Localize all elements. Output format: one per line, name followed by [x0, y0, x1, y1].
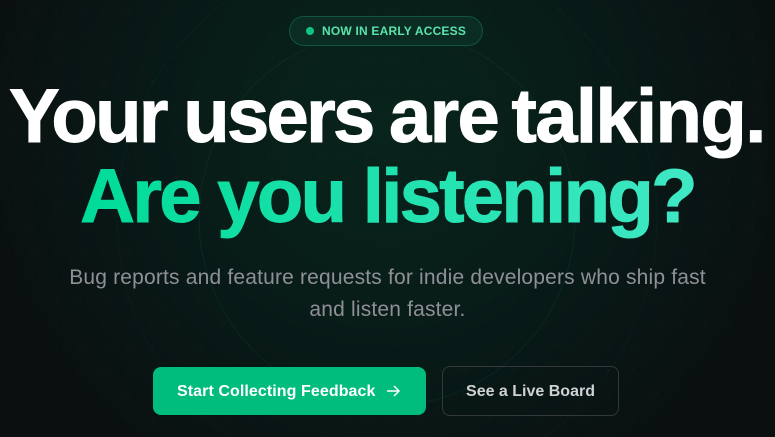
button label: See a Live Board: [466, 383, 595, 400]
badge: now in early access: [289, 16, 483, 46]
secondary button: [442, 366, 619, 416]
icon: arrow: [387, 386, 400, 396]
subheading: and listen faster.: [309, 298, 466, 321]
button label: Start Collecting Feedback: [177, 383, 376, 400]
icon: status dot: [306, 27, 314, 35]
primary button: [153, 367, 426, 415]
subheading: Bug reports and feature requests for indie developers who ship fast: [69, 266, 706, 289]
subheading: [69, 266, 706, 321]
heading line 1: Your users are talking.: [9, 74, 765, 159]
badge label: NOW IN EARLY ACCESS: [322, 24, 466, 38]
heading line 2: Are you listening?: [80, 154, 695, 239]
